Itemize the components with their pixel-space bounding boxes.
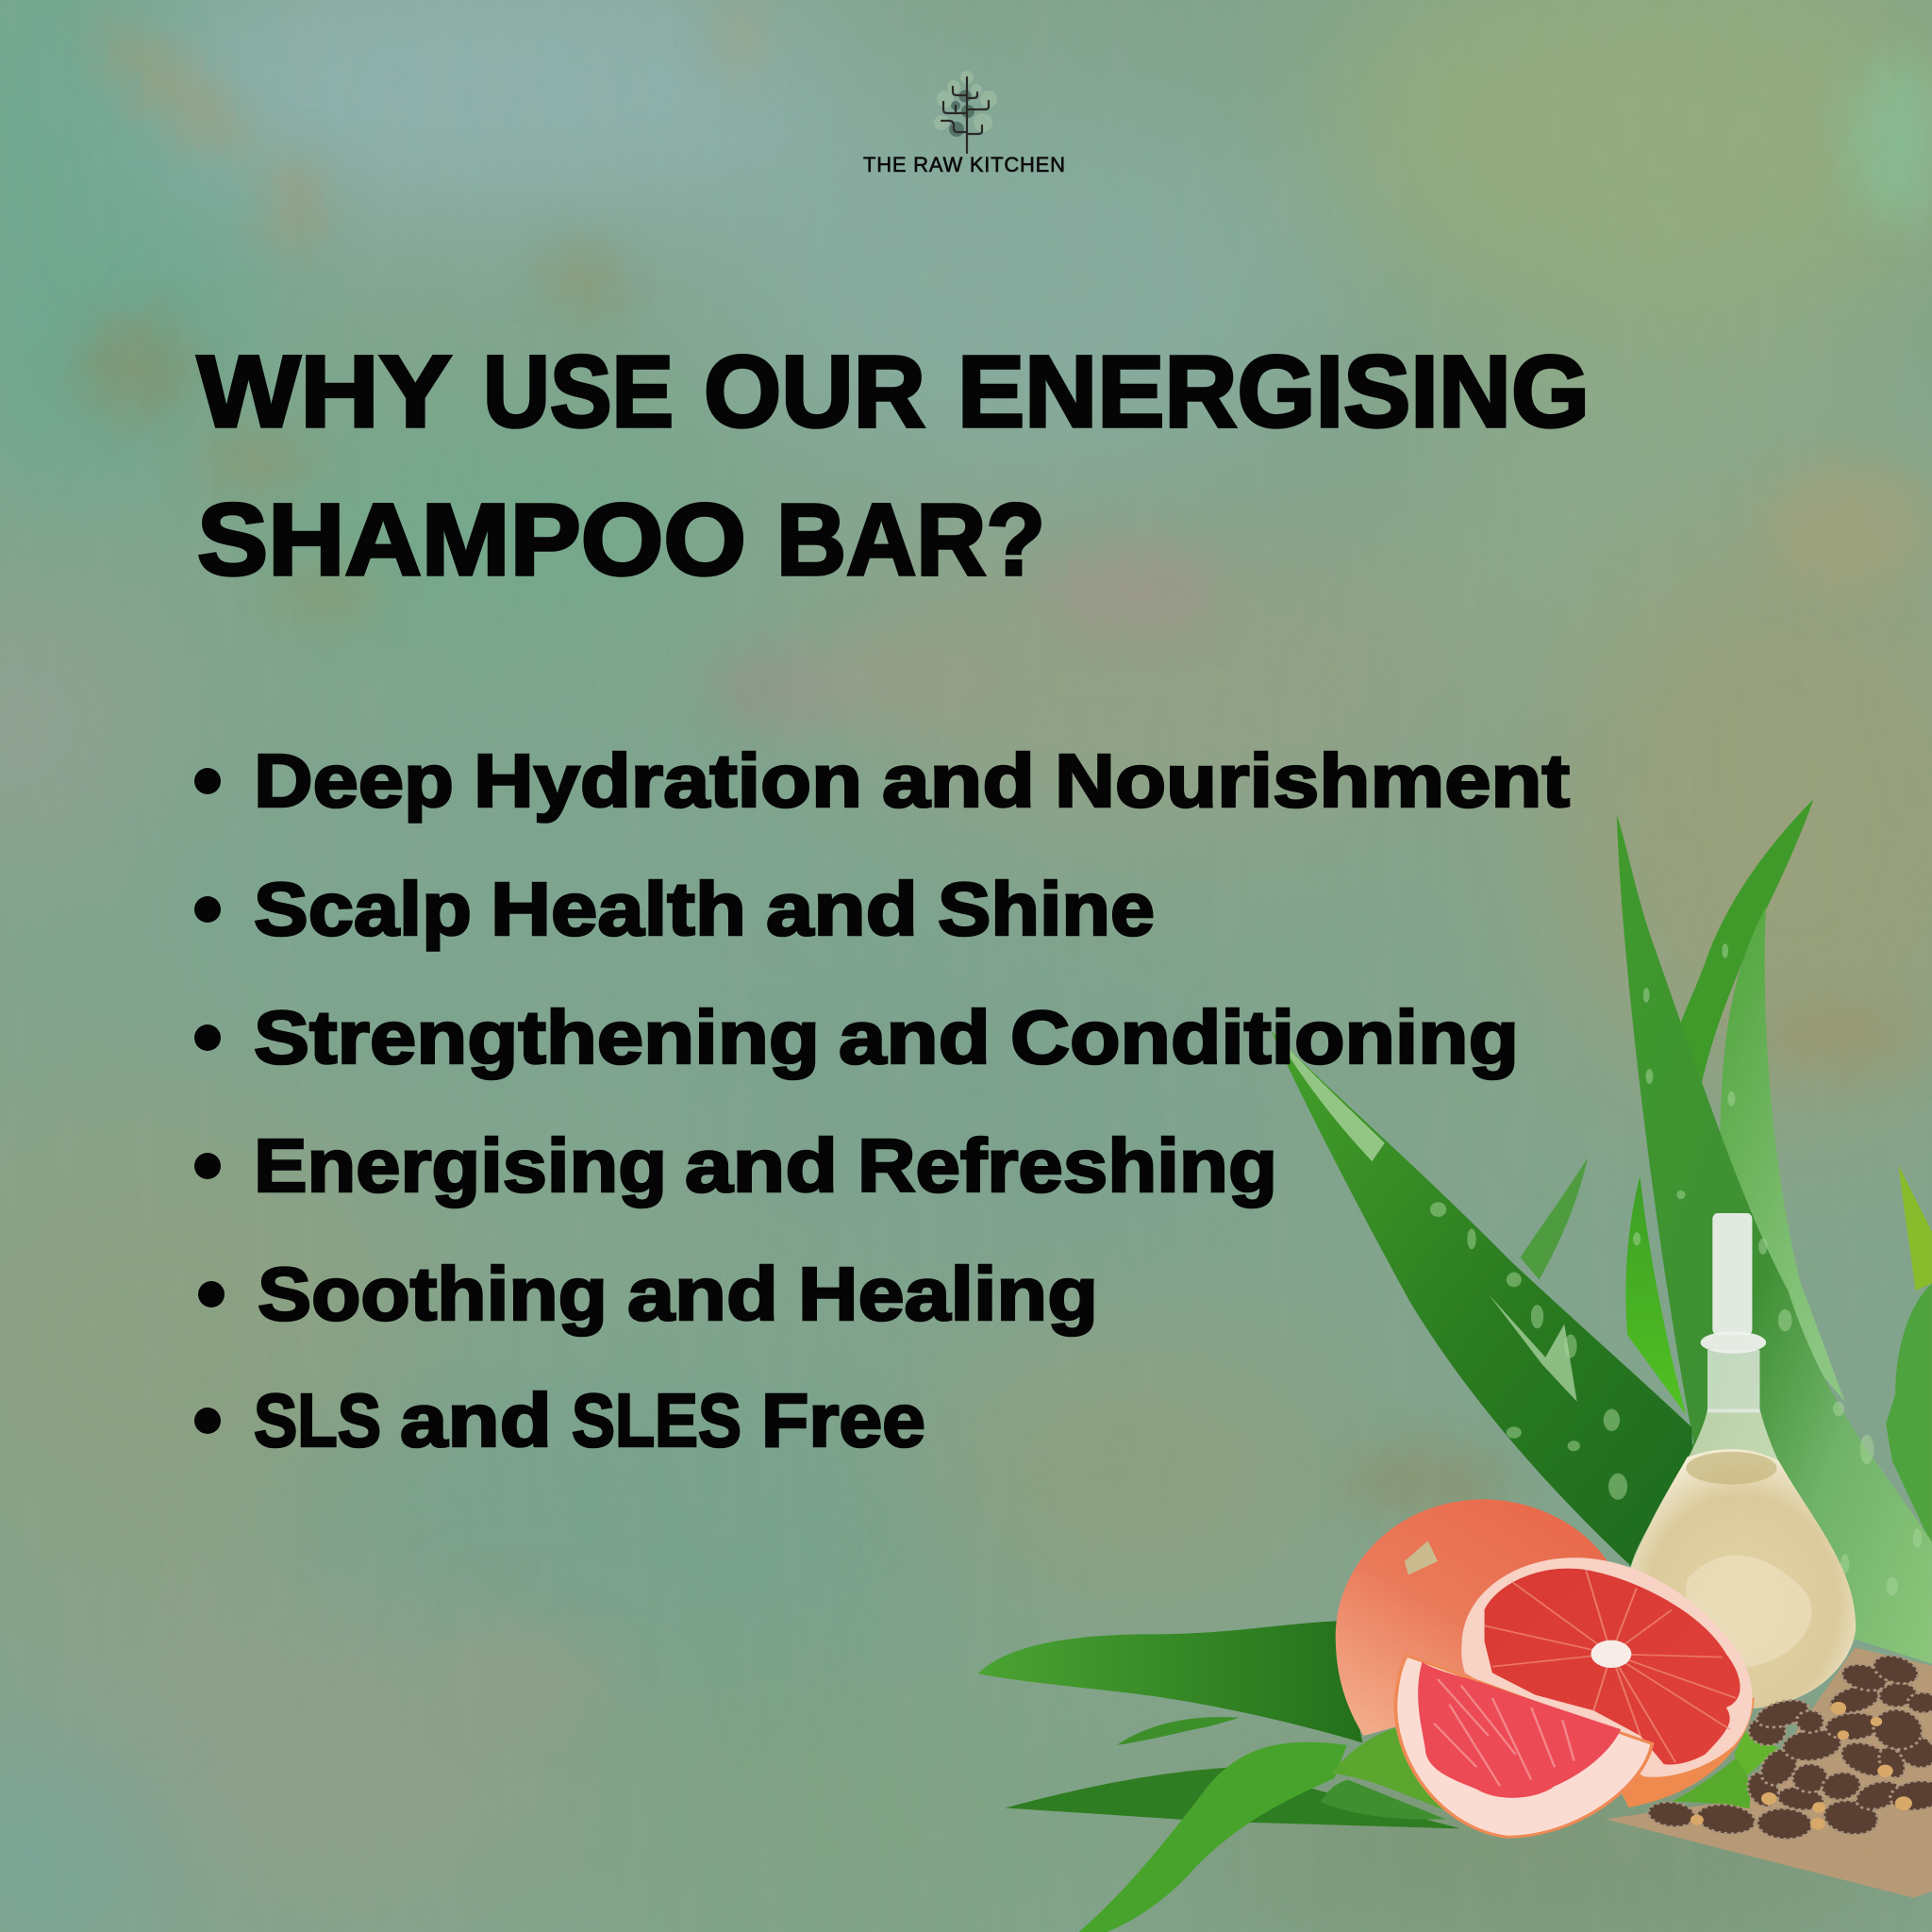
benefit: Strengthening and Conditioning: Conditioning bbox=[1010, 995, 1519, 1079]
benefit: SLS and SLES Free: SLES bbox=[572, 1378, 741, 1462]
benefit: Deep Hydration and Nourishment: Deep bbox=[254, 739, 454, 823]
bean caruncles bbox=[1690, 1702, 1912, 1830]
whole grapefruit bbox=[1336, 1499, 1607, 1736]
aloe leaf: tall bbox=[1617, 814, 1932, 1664]
benefit: Scalp Health and Shine: Shine bbox=[938, 867, 1155, 951]
icon: tree bbox=[934, 71, 997, 153]
benefit: SLS and SLES Free: and bbox=[400, 1378, 552, 1462]
title: WHY bbox=[197, 334, 452, 448]
benefit: Energising and Refreshing: Energising bbox=[254, 1124, 667, 1208]
benefit: Strengthening and Conditioning: and bbox=[839, 995, 991, 1079]
benefit: Energising and Refreshing: Refreshing bbox=[858, 1124, 1277, 1208]
aloe leaves behind bbox=[1520, 799, 1932, 1545]
title bbox=[197, 334, 1590, 596]
title: OUR bbox=[704, 334, 925, 448]
oil bottle bbox=[1628, 1213, 1856, 1708]
benefit: Deep Hydration and Nourishment: and bbox=[882, 739, 1035, 823]
benefit: Soothing and Healing: and bbox=[627, 1252, 778, 1336]
burlap mat bbox=[1606, 1648, 1932, 1898]
benefit: SLS and SLES Free: Free bbox=[761, 1378, 925, 1462]
benefit: Scalp Health and Shine: Health bbox=[491, 867, 746, 951]
title: USE bbox=[483, 334, 674, 448]
leaf light edge bbox=[1274, 1034, 1385, 1161]
grapefruit wedge bbox=[1395, 1656, 1652, 1837]
benefit: Soothing and Healing: Soothing bbox=[258, 1252, 608, 1336]
aloe leaf: big diagonal bbox=[1272, 1031, 1693, 1566]
benefit: Scalp Health and Shine: Scalp bbox=[254, 867, 472, 951]
title: BAR? bbox=[776, 482, 1045, 596]
fruit, mat and beans layer bbox=[1321, 1499, 1932, 1898]
benefit: Energising and Refreshing bbox=[194, 1124, 1277, 1208]
castor beans bbox=[1646, 1650, 1932, 1840]
title: ENERGISING bbox=[958, 334, 1590, 448]
benefits list bbox=[194, 739, 1570, 1462]
illustration: aloe, oil, grapefruit and castor beans bbox=[978, 799, 1932, 1932]
benefit: SLS and SLES Free: SLS bbox=[254, 1378, 381, 1462]
water droplets bbox=[1430, 943, 1922, 1596]
benefit: SLS and SLES Free bbox=[194, 1378, 925, 1462]
benefit: Strengthening and Conditioning: Strengthening bbox=[254, 995, 820, 1079]
benefit: Deep Hydration and Nourishment: Nourishment bbox=[1055, 739, 1570, 823]
aloe leaves lower bbox=[978, 1621, 1460, 1932]
benefit: Deep Hydration and Nourishment bbox=[194, 739, 1570, 823]
benefit: Soothing and Healing: Healing bbox=[798, 1252, 1098, 1336]
benefit: Scalp Health and Shine: and bbox=[766, 867, 918, 951]
aloe and oil layer bbox=[978, 799, 1932, 1932]
title: SHAMPOO bbox=[197, 482, 746, 596]
logo wordmark: THE RAW KITCHEN bbox=[863, 153, 1065, 176]
logo: The Raw Kitchen bbox=[863, 71, 1065, 176]
benefit: Energising and Refreshing: and bbox=[685, 1124, 838, 1208]
green leaves under fruit bbox=[1321, 1728, 1779, 1820]
leaf highlight bbox=[1489, 1294, 1577, 1402]
benefit: Deep Hydration and Nourishment: Hydration bbox=[474, 739, 862, 823]
grapefruit half bbox=[1461, 1557, 1755, 1807]
benefit: Scalp Health and Shine bbox=[194, 867, 1155, 951]
benefit: Strengthening and Conditioning bbox=[194, 995, 1519, 1079]
benefit: Soothing and Healing bbox=[198, 1252, 1098, 1336]
